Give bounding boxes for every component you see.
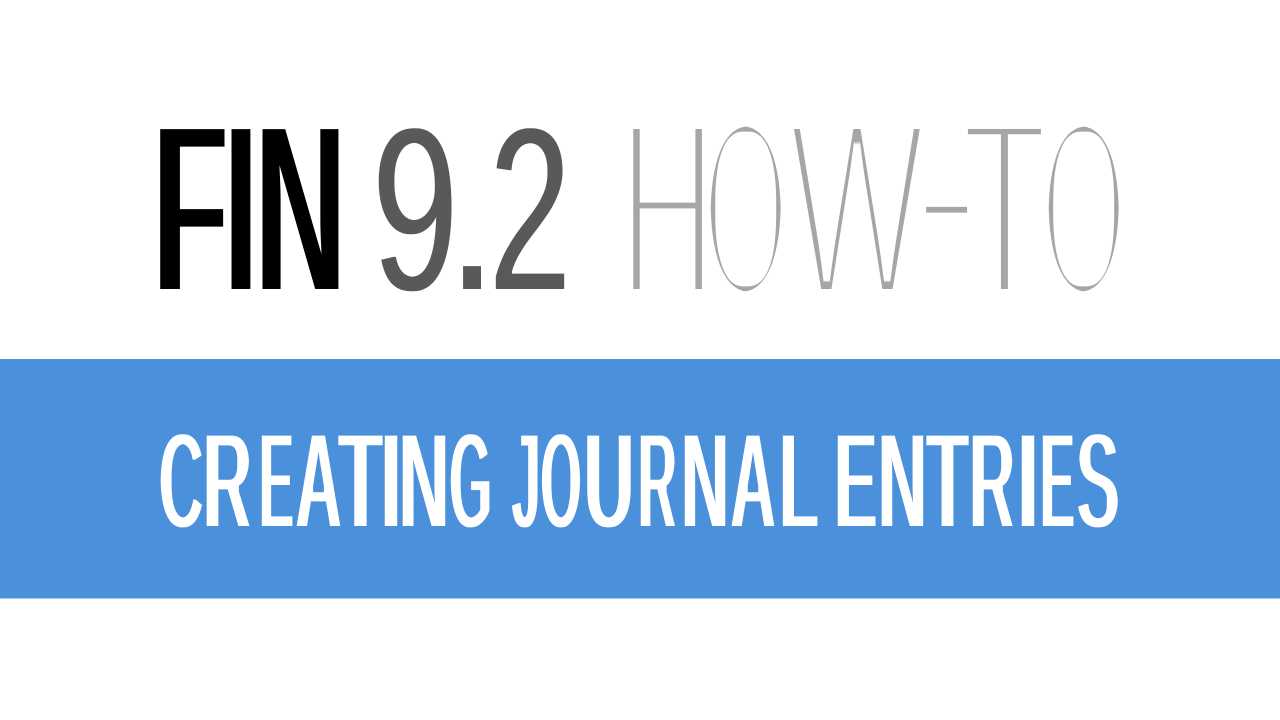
title: HOW-TO: W [788, 67, 926, 350]
title: HOW-TO: O [702, 67, 789, 350]
title: FIN: I [225, 71, 257, 347]
subtitle: creating journal entries [159, 402, 1119, 559]
subtitle: creating journal entries: G [450, 402, 492, 559]
subtitle: creating journal entries: I [381, 402, 401, 559]
subtitle: creating journal entries: A [295, 402, 342, 559]
subtitle: creating journal entries: N [878, 402, 927, 559]
title: 9.2: 9 [372, 80, 458, 340]
title: HOW-TO [619, 48, 1127, 350]
subtitle: creating journal entries: U [584, 402, 634, 559]
subtitle: creating journal entries: L [780, 402, 817, 559]
title: 9.2: 2 [490, 80, 570, 340]
subtitle: creating journal entries: N [681, 402, 729, 559]
subtitle: creating journal entries: R [203, 402, 252, 559]
subtitle: creating journal entries: E [259, 402, 293, 559]
title: HOW-TO: H [619, 67, 716, 350]
subtitle: creating journal entries: N [399, 402, 449, 559]
title: 9.2: . [449, 80, 495, 340]
infographic canvas: O [1040, 67, 1127, 350]
subtitle: creating journal entries: A [730, 402, 776, 559]
title: HOW-TO: T [962, 67, 1047, 350]
subtitle: creating journal entries: E [834, 402, 877, 559]
subtitle: creating journal entries: T [927, 402, 968, 559]
subtitle: creating journal entries: R [970, 402, 1015, 559]
title: FIN: F [153, 71, 228, 347]
infographic canvas: S [1076, 402, 1119, 559]
title: 9.2 [372, 80, 570, 340]
title: HOW-TO: - [915, 48, 979, 331]
subtitle: creating journal entries: T [338, 402, 382, 559]
subtitle: creating journal entries: O [541, 402, 581, 559]
subtitle: creating journal entries: J [512, 402, 540, 559]
banner: blue band [0, 359, 1280, 598]
subtitle: creating journal entries: I [1018, 402, 1038, 559]
subtitle: creating journal entries: R [638, 402, 676, 559]
title: FIN: N [255, 71, 346, 347]
subtitle: creating journal entries: C [159, 402, 204, 559]
subtitle: creating journal entries: E [1040, 402, 1074, 559]
